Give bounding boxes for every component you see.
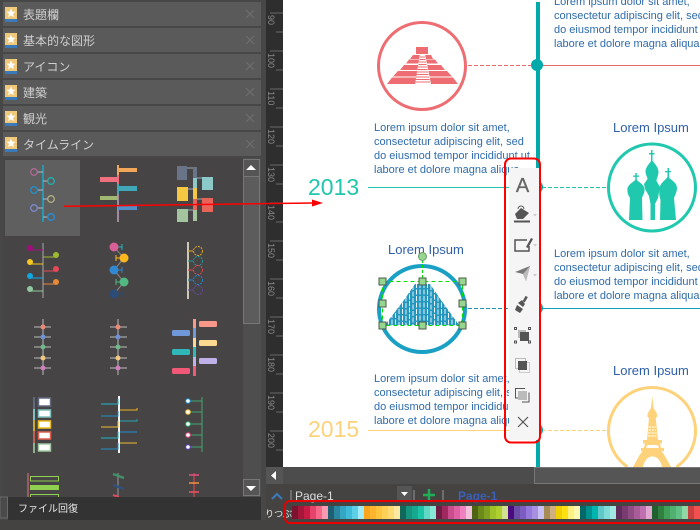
vertical ruler: 160 — [266, 281, 276, 296]
vertical ruler: 200 — [266, 433, 276, 448]
gallery scrollbar — [243, 158, 261, 497]
red arrow from gallery to canvas — [64, 200, 323, 206]
vertical ruler: 90 — [266, 15, 276, 25]
category header: 表題欄: 表題欄 — [23, 8, 59, 22]
text block: do eiusmod tempor incididunt ut — [374, 401, 530, 413]
template: bar timeline — [100, 165, 137, 222]
vertical ruler: 180 — [266, 357, 276, 372]
category header: 建築 — [3, 80, 261, 104]
entry: selected pyramid shape (middle left) — [374, 242, 700, 427]
category header: 観光: 観光 — [23, 112, 47, 126]
category header: タイムライン: タイムライン — [23, 138, 94, 152]
category header: タイムライン — [3, 132, 261, 156]
icon: group select — [514, 328, 530, 343]
vertical ruler — [266, 0, 283, 467]
text block: middle right: labore et dolore magna aliqua. — [554, 290, 700, 302]
vertical ruler: 100 — [266, 53, 276, 68]
category header: 観光 — [3, 106, 261, 130]
template: diagonal timeline — [113, 473, 124, 497]
year label 2015: 2015 — [308, 416, 359, 442]
template: cross dot timeline A — [34, 319, 51, 375]
timeline node — [531, 302, 543, 314]
page tabs row: Page-1 — [458, 489, 498, 503]
category header: アイコン: アイコン — [23, 60, 70, 74]
timeline node — [531, 424, 543, 436]
template: cross dot timeline B — [110, 319, 127, 375]
floating toolbar — [505, 158, 540, 442]
heading: Lorem Ipsum — [613, 363, 689, 378]
label: fill: りつぶ — [265, 509, 292, 519]
selected template highlight — [5, 160, 80, 236]
template: dashed circle timeline — [188, 242, 202, 299]
connector: yellow — [542, 430, 607, 432]
template gallery background — [3, 158, 243, 497]
vertical ruler: 110 — [266, 91, 276, 105]
text block: Lorem ipsum dolor sit amet, — [374, 373, 510, 385]
year label 2013: 2013 — [308, 174, 359, 200]
icon: hatched pyramid in circle — [379, 266, 465, 352]
icon: arrow — [515, 266, 537, 281]
icon: collapse chevron — [272, 494, 282, 499]
icon: text A: A — [516, 175, 530, 197]
template: red cross timeline — [189, 473, 199, 497]
connector: red — [468, 64, 700, 66]
template: flag timeline — [33, 397, 50, 453]
vertical ruler: 120 — [266, 129, 276, 144]
text block: consectetur adipiscing elit, sed — [374, 136, 524, 148]
vertical ruler: 130 — [266, 167, 276, 182]
vertical ruler: 190 — [266, 395, 276, 410]
text block: do eiusmod tempor incididunt ut — [374, 150, 530, 162]
template: green dot timeline — [186, 397, 202, 452]
template: circle timeline — [31, 165, 54, 222]
connector: teal — [542, 186, 607, 188]
connector: blue — [468, 308, 700, 310]
template: line branch timeline — [101, 396, 137, 453]
icon: brush — [515, 296, 528, 313]
canvas page — [283, 0, 700, 467]
category header: 基本的な図形: 基本的な図形 — [23, 33, 95, 48]
text block: top right: labore et dolore magna aliqua. — [554, 38, 700, 50]
icon: Eiffel tower in circle — [609, 387, 696, 467]
category header: 基本的な図形 — [3, 28, 261, 52]
text block: middle right: Lorem ipsum dolor sit amet, — [554, 248, 690, 260]
template: rounded label timeline — [172, 319, 217, 376]
text block: labore et dolore magna aliqua. — [374, 415, 523, 427]
page tabs row: Page-1 — [295, 489, 334, 503]
timeline spine — [536, 2, 540, 467]
category header: 表題欄 — [3, 2, 261, 26]
vertical ruler: 170 — [266, 319, 276, 334]
selection box with handles — [379, 252, 466, 329]
vertical ruler: 140 — [266, 205, 276, 220]
entry: onion dome church (right) — [531, 120, 696, 231]
red highlight around toolbar — [505, 158, 540, 442]
template: pin timeline — [27, 243, 59, 298]
heading: Lorem Ipsum — [388, 242, 464, 257]
entry: Eiffel tower (bottom right) — [531, 363, 696, 467]
text block: top right: consectetur adipiscing elit, sed — [554, 10, 700, 22]
icon: line style — [515, 238, 537, 251]
page tabs row — [272, 486, 498, 503]
text block: consectetur adipiscing elit, sed — [374, 387, 524, 399]
icon: church in circle — [608, 144, 696, 231]
panel: shape library sidebar — [0, 0, 266, 520]
text block: Lorem ipsum dolor sit amet, — [374, 122, 510, 134]
template: hexagon zigzag timeline — [110, 242, 128, 298]
icon: add page — [423, 489, 435, 501]
horizontal scrollbar — [266, 467, 700, 484]
template: green box timeline — [28, 473, 59, 497]
text block: labore et dolore magna aliqua. — [374, 164, 523, 176]
heading: Lorem Ipsum — [613, 120, 689, 135]
text block: middle right: consectetur adipiscing elit, sed — [554, 262, 700, 274]
icon: send to back — [516, 388, 529, 402]
icon: close — [518, 417, 528, 427]
icon: fill bucket — [514, 206, 537, 222]
red highlight around palette — [285, 501, 700, 523]
entry: pyramid (top left) — [374, 22, 700, 176]
icon: bring to front — [516, 358, 530, 372]
template: block timeline — [177, 166, 213, 222]
timeline node — [531, 181, 543, 193]
file recovery tab: ファイル回復 — [18, 502, 78, 515]
icon: pyramid in circle — [378, 22, 466, 110]
timeline node — [531, 59, 543, 71]
file recovery tab — [0, 497, 261, 520]
colour palette — [292, 506, 700, 519]
category header: アイコン — [3, 54, 261, 78]
category header: 建築: 建築 — [23, 85, 47, 100]
vertical ruler: 150 — [266, 243, 276, 258]
